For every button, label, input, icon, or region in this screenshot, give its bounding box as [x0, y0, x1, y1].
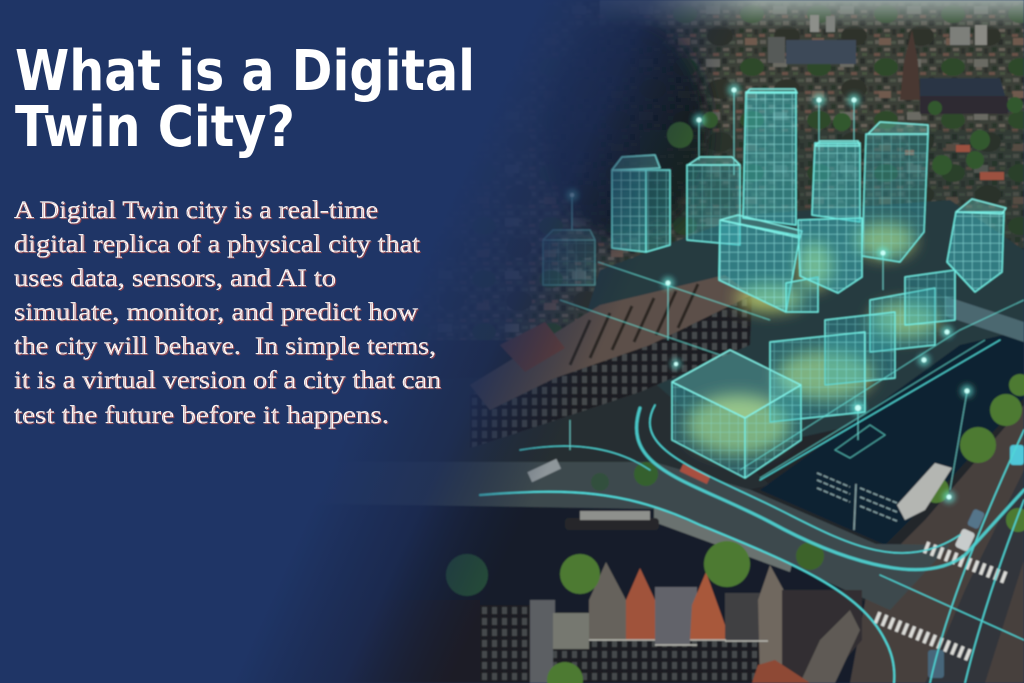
distant trees — [667, 97, 1023, 175]
dark traffic lanes — [925, 470, 1024, 683]
sensor pins — [566, 84, 973, 503]
base B — [798, 218, 862, 293]
tower A — [743, 89, 797, 225]
central row houses — [470, 275, 752, 448]
description text: test the future before it happens. — [14, 400, 389, 429]
base A — [719, 215, 818, 312]
title: What is a Digital — [15, 39, 475, 104]
church — [900, 30, 1010, 114]
wireframe buildings — [543, 89, 1024, 478]
right canal — [760, 330, 1024, 545]
bottom row houses — [300, 562, 862, 683]
distant towers — [768, 15, 987, 64]
trees — [178, 374, 1024, 683]
description text: simulate, monitor, and predict how — [14, 297, 419, 326]
data annotations on water — [817, 473, 897, 530]
description text — [14, 195, 441, 429]
description text: the city will behave. In simple terms, — [14, 331, 436, 360]
crosswalks — [876, 547, 1006, 656]
lower water — [0, 505, 880, 683]
description text: digital replica of a physical city that — [14, 229, 420, 258]
title: Twin City? — [15, 95, 295, 160]
left street and quay — [0, 370, 770, 510]
red roofs — [905, 145, 1004, 180]
yellow-green glow under holograms — [686, 222, 939, 455]
upper right bridge — [945, 296, 1024, 342]
tower B — [812, 141, 860, 222]
low block G — [543, 230, 595, 285]
plaza ground — [560, 200, 1024, 470]
description text: uses data, sensors, and AI to — [14, 263, 336, 292]
large block H — [672, 350, 801, 478]
wire street frames — [560, 262, 1024, 478]
boats and cars — [527, 445, 1024, 678]
cube D — [947, 199, 1006, 292]
tower F — [687, 157, 740, 245]
distant city district — [300, 0, 1024, 340]
middle blocks — [770, 270, 955, 422]
bridge side — [654, 507, 792, 572]
tower E — [612, 155, 670, 252]
main bridge road — [300, 462, 950, 610]
tower C — [862, 122, 928, 262]
glowing road lines — [480, 340, 1024, 683]
description text: it is a virtual version of a city that can — [14, 365, 441, 394]
title — [15, 39, 475, 160]
right road area — [850, 405, 1024, 683]
description text: A Digital Twin city is a real-time — [14, 195, 378, 224]
